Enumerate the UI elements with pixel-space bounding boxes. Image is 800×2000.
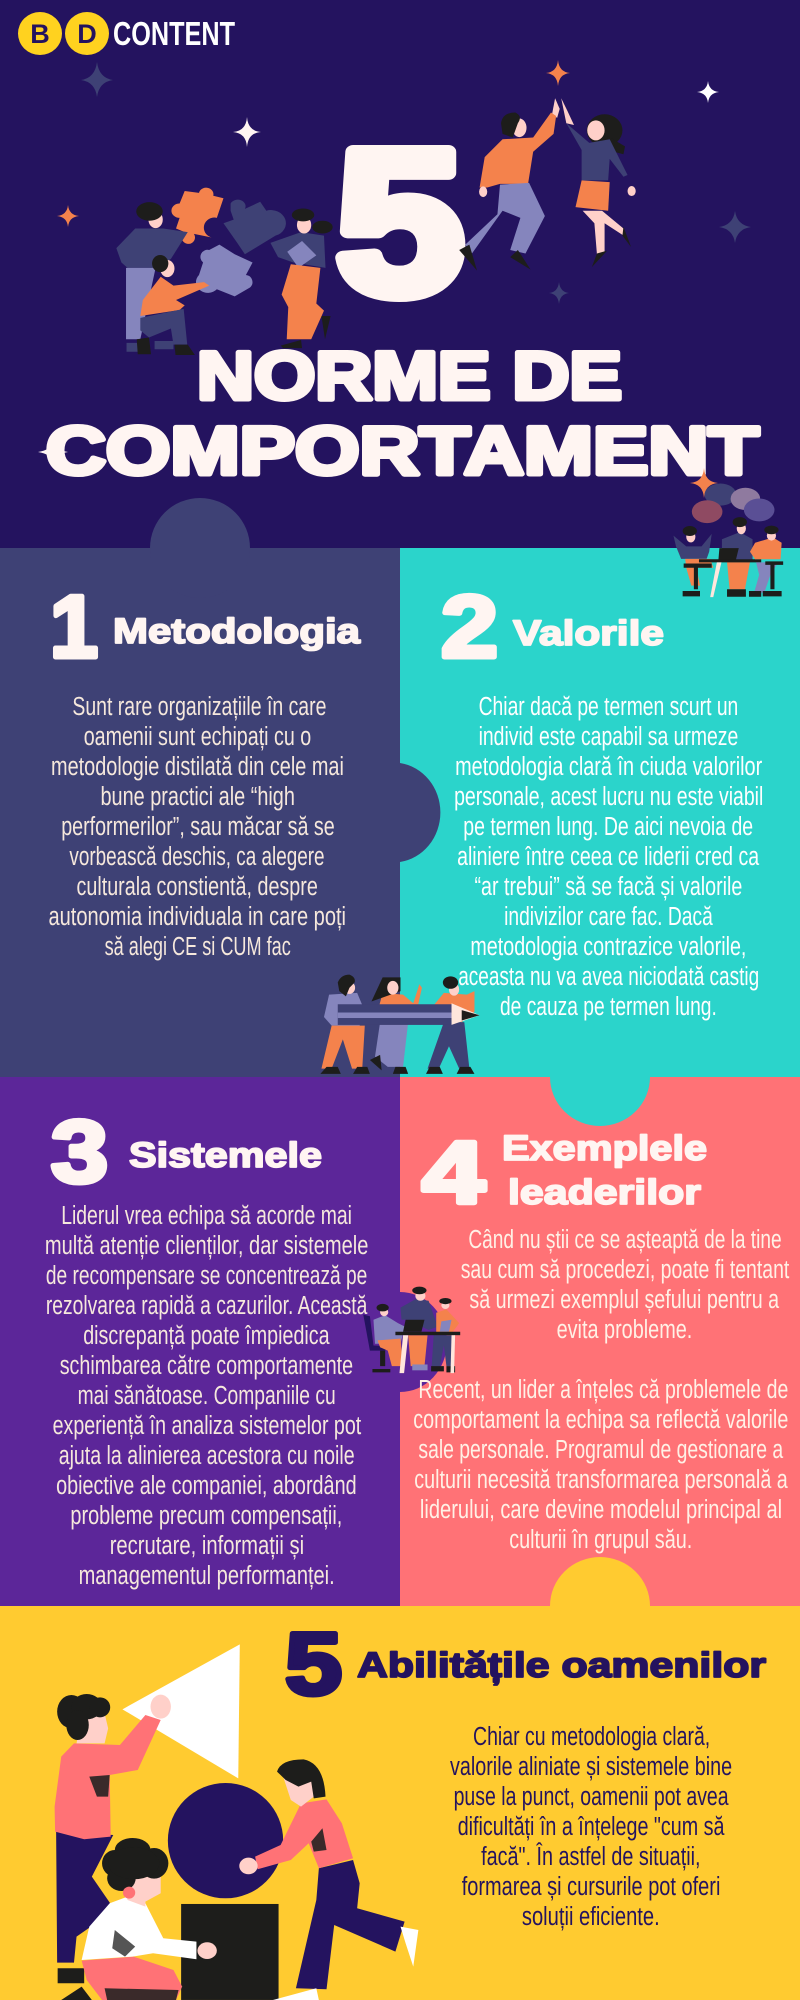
decorative star over title [690,468,718,498]
heading: Sistemele [129,1136,322,1175]
body text: culturii în grupul său. [509,1526,692,1554]
white triangle [122,1644,240,1778]
body text: Liderul vrea echipa să acorde mai [61,1202,352,1230]
logo [18,12,235,55]
body text: bune practici ale “high [100,783,295,811]
body text: performerilor”, sau măcar să se [61,813,335,841]
crouching woman [82,1838,217,2000]
body text: rezolvarea rapidă a cazurilor. Această [46,1292,368,1320]
body text: vorbească deschis, ca alegere [69,843,325,871]
title line 2: COMPORTAMENT [46,413,759,489]
decorative stars [38,60,751,462]
puzzle tab: panel 3 into panel 4 [400,1292,447,1392]
logo: B [30,19,50,49]
body text: soluții eficiente. [522,1903,660,1931]
illustration: high five couple [459,98,636,271]
panel 3 background [0,1077,400,1607]
number 5: 5 [285,1614,342,1713]
body text: multă atenție clienților, dar sistemele [45,1232,368,1260]
puzzle tab: top of panel 1 [150,498,250,598]
body text: recrutare, informații și [110,1532,304,1560]
body text: Sunt rare organizațiile în care [72,693,326,721]
panel 1 background [0,548,400,1078]
body text [45,1202,368,1590]
number 3: 3 [51,1102,108,1201]
panel 4: leaders' examples [413,1123,789,1554]
illustration: puzzle team [116,188,333,355]
puzzle tab: panel 1 into panel 2 [400,763,440,862]
body text: discrepanță poate împiedica [83,1322,330,1350]
body text [413,1226,789,1554]
body text: managementul performanței. [79,1562,335,1590]
heading [502,1129,707,1212]
panel 2: values [441,577,763,1021]
body text: dificultăți în a înțelege "cum să [458,1813,725,1841]
body text: indivizilor care fac. Dacă [504,903,713,931]
illustration: team carrying pencil [320,975,480,1074]
body text: facă". În astfel de situații, [481,1842,700,1871]
title line 1: NORME DE [197,338,622,414]
heading: Abilitățile oamenilor [357,1646,766,1685]
header background [0,0,800,549]
logo: D [77,19,97,49]
panel 5 background [0,1606,800,2000]
body text [48,693,346,961]
illustration: meeting team with speech bubbles [673,484,783,597]
puzzle tab: panel 5 into panel 4 [550,1557,650,1606]
big number 5: 5 [336,108,464,337]
panel 1: methodology [48,577,361,961]
heading: Valorile [513,614,664,653]
body text: formarea și cursurile pot oferi [462,1873,720,1901]
body text: de cauza pe termen lung. [500,993,717,1021]
right woman [239,1759,418,2000]
body text: ajuta la alinierea acestora cu noile [59,1442,355,1470]
body text: Chiar cu metodologia clară, [473,1723,710,1751]
body text: autonomia individuala in care poți [48,903,346,931]
heading: leaderilor [508,1173,701,1212]
body text: oamenii sunt echipați cu o [84,723,311,751]
body text: evita probleme. [557,1316,692,1344]
puzzle tab: panel 2 into panel 4 [550,1077,650,1126]
body text: metodologie distilată din cele mai [51,753,344,781]
panel 3: systems [45,1102,368,1590]
panel 5: people skills [285,1614,766,1931]
body text: culturala constientă, despre [76,873,318,901]
body text: de recompensare se concentrează pe [46,1262,367,1290]
body text: probleme precum compensații, [70,1502,342,1530]
standing man [55,1694,171,2000]
body text: să alegi CE si CUM fac [105,933,291,961]
number 1: 1 [50,577,98,676]
body text: experiență în analiza sistemelor pot [53,1412,361,1440]
body text [450,1723,732,1931]
body text [454,693,763,1021]
heading: Metodologia [113,612,361,651]
illustration: people building shapes [55,1644,418,2000]
logo: CONTENT [113,15,235,52]
body text: obiective ale companiei, abordând [56,1472,357,1500]
number 2: 2 [441,577,498,676]
navy circle [168,1783,283,1898]
black square [181,1904,279,2000]
body text: mai sănătoase. Companiile cu [78,1382,336,1410]
heading: Exemplele [502,1129,707,1168]
illustration: team around laptop [363,1287,460,1373]
number 4: 4 [422,1123,485,1222]
panel 2 background [400,548,800,1078]
body text: schimbarea către comportamente [60,1352,353,1380]
panel 4 background [400,1077,800,1607]
